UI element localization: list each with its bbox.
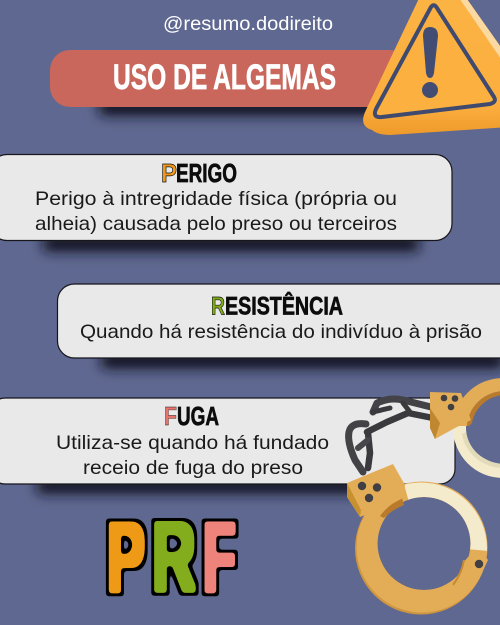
text: perigo description — [35, 188, 397, 235]
icon: warning triangle — [363, 0, 500, 135]
heading: fuga — [164, 401, 219, 431]
panel: fuga — [0, 398, 455, 484]
lower cuff dark rim — [355, 482, 487, 614]
PRF logo: R — [153, 504, 195, 610]
text: fuga description: receio de fuga do preso — [83, 457, 303, 479]
card 1 shadow — [42, 236, 420, 252]
upper cuff rivets — [441, 395, 458, 410]
upper cuff ring — [453, 378, 500, 478]
heading: resistencia: ESISTÊNCIA — [225, 290, 343, 320]
heading: perigo: ERIGO — [176, 158, 237, 188]
text: fuga description — [56, 432, 329, 479]
heading: fuga: F — [164, 401, 177, 431]
heading: resistencia — [211, 290, 343, 320]
icon: handcuffs — [347, 378, 500, 614]
PRF logo — [108, 504, 234, 610]
text: fuga description: Utiliza-se quando há fundado — [56, 432, 329, 454]
lower cuff pin end — [450, 553, 488, 592]
card 2 shadow — [100, 353, 500, 369]
text: perigo description: alheia) causada pelo preso ou terceiros — [35, 213, 397, 235]
upper cuff block — [430, 392, 471, 439]
text: resistencia description: Quando há resistência do indivíduo à prisão — [80, 321, 482, 343]
heading: perigo — [161, 158, 237, 188]
PRF logo: F — [204, 504, 234, 610]
title: USO DE ALGEMAS — [113, 58, 336, 97]
lower cuff rivets — [358, 482, 483, 568]
lower cuff block — [347, 464, 405, 517]
inner block shadow — [380, 498, 404, 518]
heading: fuga: UGA — [177, 401, 219, 431]
card 3 shadow — [36, 479, 366, 494]
banner shadow — [98, 100, 383, 116]
heading: resistencia: R — [211, 292, 225, 320]
text: perigo description: Perigo à intregridade física (própria ou — [35, 188, 397, 210]
heading: perigo: P — [161, 158, 177, 188]
lower cuff gold ring — [356, 481, 488, 612]
handle: @resumo.dodireito — [163, 14, 333, 35]
title banner — [50, 50, 410, 107]
lower cuff cream arc — [404, 482, 487, 551]
panel: perigo — [0, 154, 452, 240]
PRF logo: P — [108, 504, 144, 610]
chain — [349, 399, 435, 472]
panel: resistencia — [58, 284, 500, 358]
